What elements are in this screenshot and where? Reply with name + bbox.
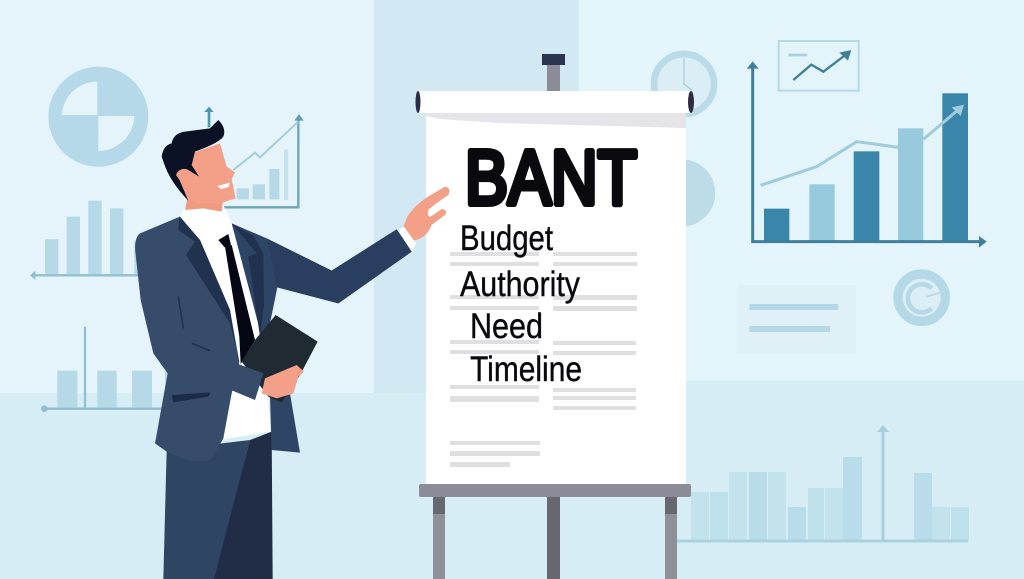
title: BANT: BANT [465, 135, 637, 221]
presenter [135, 120, 449, 579]
small trend card [779, 41, 859, 91]
main bar chart with trend line [747, 61, 987, 248]
right background charts [654, 41, 987, 353]
easel [416, 54, 694, 579]
left background charts [30, 67, 304, 412]
holding hand [262, 365, 304, 398]
paper roller [416, 91, 694, 113]
paper sheet [426, 100, 686, 485]
tie [218, 234, 255, 364]
bar chart: lower left [41, 327, 175, 412]
roller shadow [426, 113, 686, 128]
hair [162, 120, 224, 201]
tablet [242, 315, 318, 403]
lower sleeve [178, 342, 263, 400]
icon: clock [654, 54, 714, 114]
list item: Need: Need [470, 307, 543, 346]
pointing hand [403, 187, 449, 241]
chart paper placeholder lines [450, 252, 637, 467]
jacket [135, 217, 412, 462]
shirt cuff [398, 227, 416, 252]
easel top post [542, 54, 565, 92]
icon: target dial [898, 274, 945, 321]
smile [217, 183, 230, 189]
list item: Authority: Authority [460, 265, 580, 304]
icon: half circle [682, 159, 715, 227]
bottom right faded bar chart [677, 425, 969, 541]
neck [185, 193, 223, 212]
bar chart: middle left [30, 201, 144, 280]
easel legs [433, 497, 677, 579]
face [177, 143, 236, 203]
icon: pie chart [48, 67, 148, 167]
shirt [180, 205, 271, 439]
small growth chart [204, 107, 304, 207]
text card [737, 285, 856, 353]
trousers [163, 432, 273, 579]
list item: Budget: Budget [460, 219, 553, 258]
easel tray [419, 484, 691, 497]
ear [176, 169, 193, 185]
list item: Timeline: Timeline [470, 350, 582, 389]
